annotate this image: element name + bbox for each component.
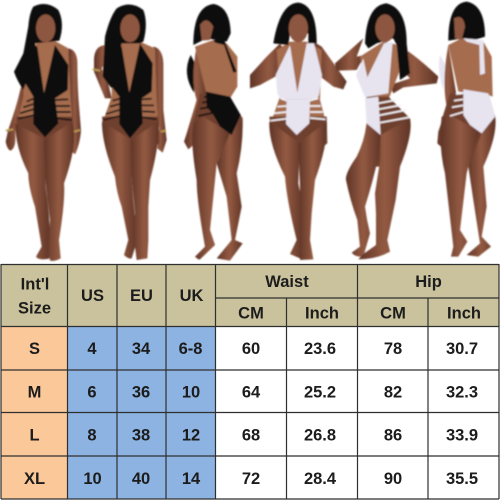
table header: Hip xyxy=(415,273,442,291)
table header: UK xyxy=(180,287,203,305)
row: S: 60 xyxy=(242,340,260,358)
row: S: 4 xyxy=(87,340,97,358)
row: M: 64 xyxy=(242,384,261,402)
table header: Inch xyxy=(447,304,481,322)
model photos xyxy=(6,2,496,261)
row: M: 10 xyxy=(182,384,200,402)
table header: US xyxy=(81,287,104,305)
row: S xyxy=(29,340,478,358)
row: M: 36 xyxy=(132,384,150,402)
table header: CM xyxy=(238,304,264,322)
figure: black swimsuit, front, hand in hair xyxy=(93,5,167,260)
row: L: 8 xyxy=(87,426,97,444)
row: XL: 72 xyxy=(242,470,260,488)
table header: CM xyxy=(380,304,406,322)
row: XL: 35.5 xyxy=(446,470,478,488)
figure: black swimsuit, back xyxy=(184,4,243,261)
row: L: 26.8 xyxy=(304,426,336,444)
row: M: 32.3 xyxy=(446,384,478,402)
row: L xyxy=(29,426,478,444)
row: XL xyxy=(24,470,478,488)
figure: white swimsuit, three-quarter view, hand on hip xyxy=(335,3,438,259)
row: S: 23.6 xyxy=(304,340,336,358)
row: M xyxy=(28,384,478,402)
row: XL: 10 xyxy=(83,470,102,488)
row: L: 33.9 xyxy=(446,426,478,444)
row: L: 68 xyxy=(242,426,260,444)
row: M: 82 xyxy=(384,384,402,402)
row: XL: 14 xyxy=(182,470,201,488)
figure: black swimsuit, front xyxy=(6,4,81,261)
table cell backgrounds xyxy=(1,264,499,499)
table header: Size xyxy=(18,300,51,318)
table header: Int'l xyxy=(21,276,49,294)
row: M: M xyxy=(28,384,41,402)
row: S: 6-8 xyxy=(179,340,202,358)
row: M: 6 xyxy=(87,384,97,402)
row: XL: 40 xyxy=(132,470,150,488)
table header: Inch xyxy=(305,304,339,322)
row: XL: 90 xyxy=(384,470,402,488)
row: L: 38 xyxy=(132,426,150,444)
row: S: 78 xyxy=(384,340,402,358)
row: S: 34 xyxy=(132,340,151,358)
table grid xyxy=(1,264,499,499)
figure: white swimsuit, front, hands on shoulders xyxy=(250,3,347,260)
row: XL: 28.4 xyxy=(304,470,337,488)
table header: Waist xyxy=(265,273,309,291)
row: S: 30.7 xyxy=(446,340,478,358)
row: M: 25.2 xyxy=(304,384,336,402)
table header xyxy=(18,273,481,322)
row: L: L xyxy=(29,426,40,444)
figure: white swimsuit, back xyxy=(437,2,496,257)
row: S: S xyxy=(29,340,40,358)
row: L: 12 xyxy=(182,426,200,444)
row: XL: XL xyxy=(24,470,45,488)
size chart table xyxy=(1,264,499,499)
table header: EU xyxy=(130,287,153,305)
row: L: 86 xyxy=(384,426,402,444)
